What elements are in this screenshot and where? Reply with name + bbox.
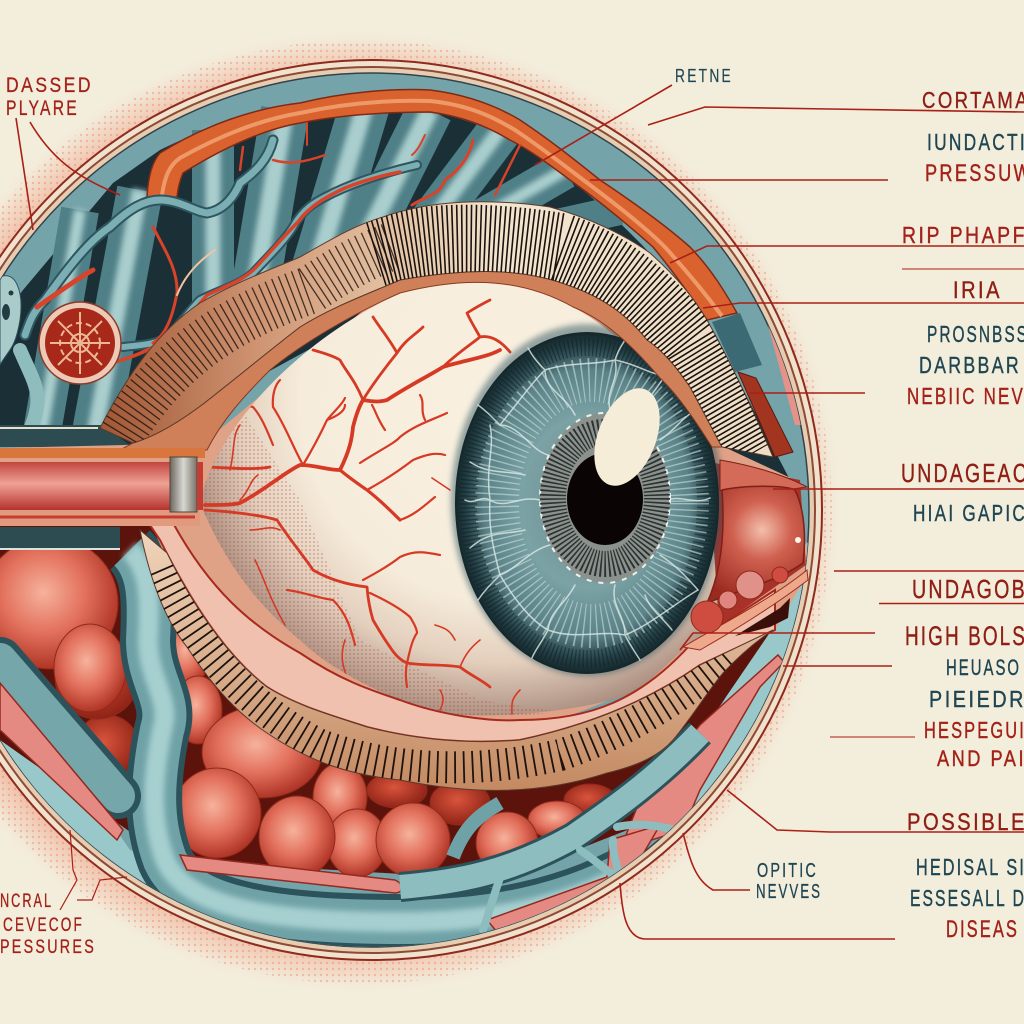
red branching vessels bbox=[37, 123, 520, 362]
label: pessures: PESSURES bbox=[0, 937, 96, 958]
lower teal vessels bbox=[0, 538, 650, 922]
lower red muscles bbox=[0, 655, 784, 932]
label: retne: RETNE bbox=[675, 66, 733, 86]
optic nerve bbox=[0, 448, 205, 526]
rail above optic nerve bbox=[0, 425, 132, 447]
left vessel with holes bbox=[0, 276, 21, 365]
label: optic nevves bbox=[756, 860, 822, 903]
upper eyelid inner strip bbox=[120, 272, 722, 450]
lower pale lining band bbox=[0, 542, 808, 947]
label: ncral: NCRAL bbox=[0, 891, 53, 912]
orange vessel band bbox=[147, 90, 737, 320]
sclera blood vessels bbox=[205, 300, 520, 715]
lower eyelid pink bands bbox=[150, 523, 775, 742]
inner ring comb bbox=[553, 432, 657, 564]
iris blue fibre comb bbox=[497, 380, 687, 626]
label: nevves: NEVVES bbox=[756, 881, 822, 903]
red gland cross-section bbox=[39, 302, 121, 384]
caruncle base bbox=[714, 463, 806, 623]
label: plyare: PLYARE bbox=[6, 97, 79, 120]
sclera stipple bbox=[203, 415, 560, 716]
label: opitic: OPITIC bbox=[757, 860, 818, 882]
iris light fibres bbox=[465, 340, 710, 660]
iris bbox=[451, 324, 723, 676]
sclera bbox=[203, 282, 720, 715]
right side wedge cells bbox=[712, 313, 801, 458]
teal muscle bundles bbox=[42, 105, 620, 432]
label: dassed: DASSED bbox=[6, 74, 93, 97]
caruncle bbox=[683, 460, 808, 650]
lower eyelid with lashes bbox=[140, 530, 773, 790]
label: cevecof: CEVECOF bbox=[3, 915, 84, 936]
inner grey ring bbox=[540, 413, 670, 583]
iris dark outer comb bbox=[468, 347, 706, 659]
upper cavity bbox=[0, 105, 790, 480]
teal branching nerve, lower right bbox=[400, 733, 700, 930]
labels: left bbox=[6, 74, 93, 120]
pupil bbox=[567, 453, 643, 545]
halo behind disc bbox=[0, 30, 842, 994]
blue vessels bbox=[20, 140, 417, 430]
upper eyelid with lashes bbox=[100, 202, 773, 457]
underlay between lids bbox=[0, 280, 810, 735]
lower cavity background bbox=[0, 525, 775, 880]
label: iria: IRIA bbox=[953, 277, 1002, 304]
labels: right column bbox=[901, 87, 1024, 943]
disc contents bbox=[0, 90, 830, 960]
outer ring bbox=[0, 60, 822, 960]
iris highlight bbox=[582, 379, 672, 495]
labels: bottom left bbox=[0, 891, 96, 958]
red tissue lobes bbox=[0, 537, 616, 878]
